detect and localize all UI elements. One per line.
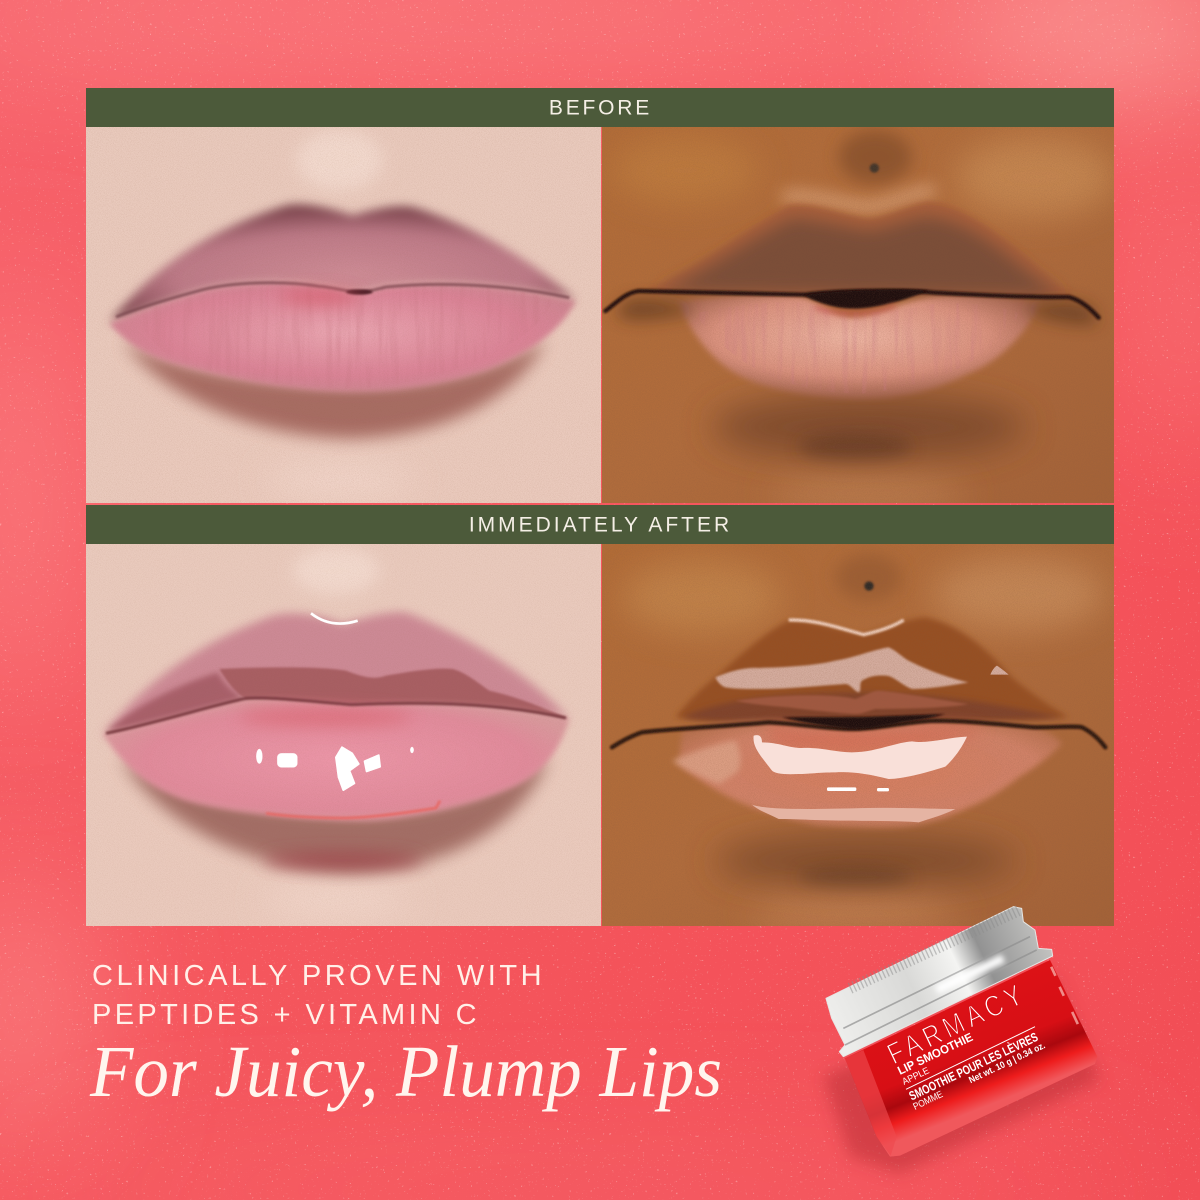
icon: product jar [823, 907, 1100, 1173]
jar label [882, 978, 1047, 1113]
subheading line one: CLINICALLY PROVEN WITH [92, 960, 545, 992]
gloss highlights [752, 735, 967, 822]
headline: For Juicy, Plump Lips [89, 1031, 722, 1112]
photo: before, dark skin lips [602, 127, 1115, 504]
subheading line two: PEPTIDES + VITAMIN C [92, 999, 480, 1031]
metal lid [826, 907, 1053, 1057]
gloss highlights [256, 613, 414, 790]
jar label: LIP SMOOTHIE [895, 1030, 975, 1078]
jar body [845, 960, 1097, 1157]
photo: after, dark skin glossy lips [602, 544, 1114, 926]
jar label: SMOOTHIE POUR LES LÈVRES [906, 1029, 1040, 1103]
jar label: POMME [912, 1089, 945, 1113]
caption text [89, 960, 722, 1112]
photo: before, light skin lips [86, 127, 601, 503]
header bar: before [86, 88, 1114, 127]
header bar: immediately after: IMMEDIATELY AFTER [469, 514, 732, 536]
photo: after, light skin glossy lips [86, 544, 601, 926]
jar label: FARMACY [882, 978, 1028, 1071]
header bar: immediately after [86, 505, 1114, 544]
side label text block [1050, 966, 1079, 1025]
jar label: Net wt. 10 g | 0.34 oz. [967, 1040, 1047, 1085]
jar label: APPLE [901, 1065, 932, 1088]
header bar: before: BEFORE [549, 96, 652, 120]
